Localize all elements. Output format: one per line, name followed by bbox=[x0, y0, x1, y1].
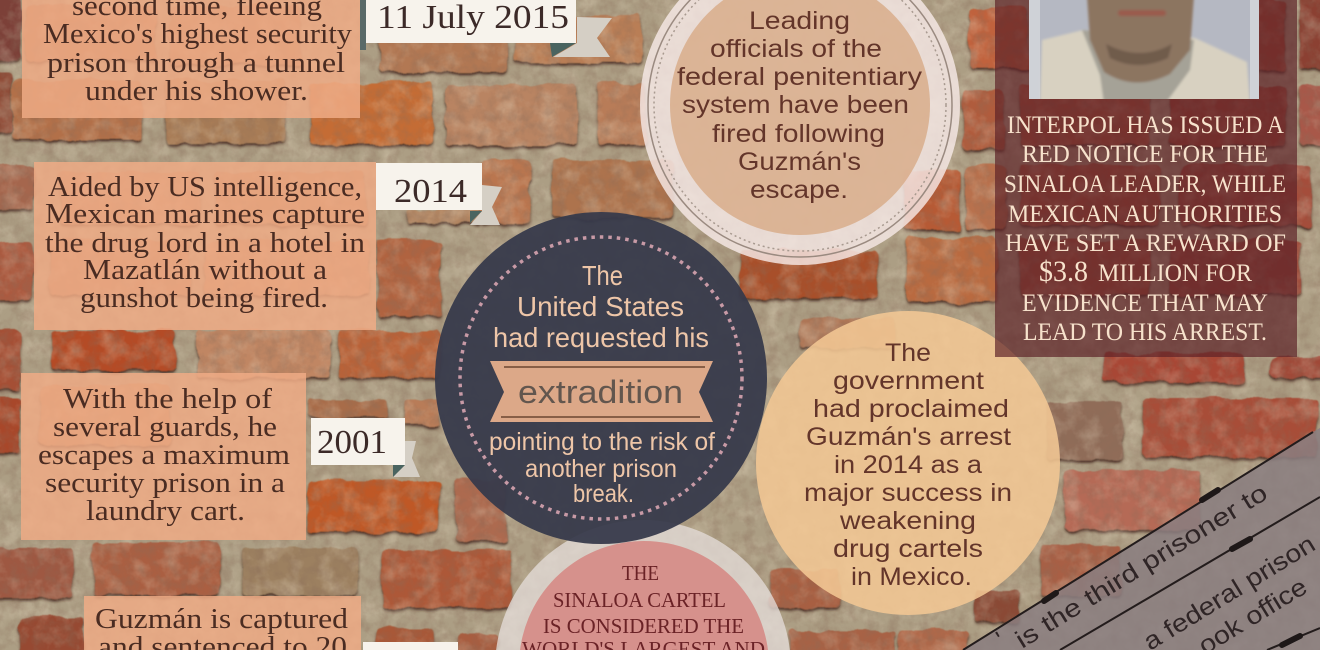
circle: officials fired: system have been bbox=[682, 91, 909, 119]
circle: dark extradition: The bbox=[582, 260, 623, 291]
timeline panel: 2015 escape bbox=[22, 0, 360, 118]
circle: dark extradition: pointing to the risk of bbox=[489, 428, 715, 456]
timeline panel: 2001 escape: escapes a maximum bbox=[38, 440, 290, 471]
panel: Interpol red notice: MILLION FOR bbox=[1098, 260, 1252, 287]
circle: pink Sinaloa cartel: SINALOA CARTEL bbox=[553, 588, 726, 612]
timeline panel: 2001 escape: several guards, he bbox=[53, 412, 277, 443]
timeline panel: 2014 capture bbox=[34, 162, 376, 330]
timeline panel: 2015 escape: Mexico's highest security bbox=[43, 19, 352, 50]
circle: pink Sinaloa cartel: IS CONSIDERED THE bbox=[543, 614, 744, 638]
circle: pink Sinaloa cartel: THE bbox=[622, 561, 659, 585]
timeline panel: 2014 capture: Aided by US intelligence, bbox=[48, 172, 362, 203]
circle: government proclaimed arrest: Guzmán's arrest bbox=[806, 423, 1011, 451]
date tag: 2014 bbox=[376, 163, 502, 225]
circle: government proclaimed arrest: drug cartels bbox=[833, 535, 983, 563]
circle: officials fired: Leading bbox=[749, 7, 850, 35]
timeline panel: 2001 escape: laundry cart. bbox=[86, 496, 245, 527]
date tag: 11 July 2015: 11 July 2015 bbox=[377, 0, 569, 36]
timeline panel: 2014 capture: Mazatlán without a bbox=[83, 255, 328, 286]
circle: government proclaimed arrest bbox=[756, 311, 1060, 615]
circle: dark extradition: another prison bbox=[525, 455, 677, 483]
circle: officials fired: officials of the bbox=[710, 35, 882, 63]
date tag: 2001: 2001 bbox=[317, 424, 387, 461]
circle: officials fired: federal penitentiary bbox=[677, 63, 923, 91]
panel: Interpol red notice: HAVE SET A REWARD OF bbox=[1005, 230, 1286, 257]
timeline panel: 2014 capture: the drug lord in a hotel in bbox=[45, 228, 365, 259]
circle: officials fired: escape. bbox=[750, 176, 848, 204]
ribbon: extradition bbox=[490, 361, 713, 422]
circle: officials fired bbox=[640, 0, 960, 265]
panel: Interpol red notice: INTERPOL HAS ISSUED A bbox=[1007, 112, 1284, 139]
circle: government proclaimed arrest: in Mexico. bbox=[851, 563, 972, 591]
circle: government proclaimed arrest: The bbox=[885, 339, 931, 367]
barbed wire banner bbox=[963, 428, 1320, 650]
date tag: 2014: 2014 bbox=[394, 173, 467, 210]
date tag: cut off at bottom bbox=[363, 642, 458, 650]
barbed wire banner: is the third prisoner to bbox=[1011, 479, 1272, 650]
timeline panel: 2015 escape: under his shower. bbox=[85, 76, 308, 107]
circle: government proclaimed arrest: weakening bbox=[839, 507, 976, 535]
circle: pink Sinaloa cartel bbox=[495, 520, 791, 650]
panel: Interpol red notice: MEXICAN AUTHORITIES bbox=[1008, 201, 1282, 228]
photo: Guzmán mugshot bbox=[1029, 0, 1259, 104]
circle: dark extradition bbox=[435, 212, 767, 544]
date tag: 11 July 2015 bbox=[360, 0, 612, 57]
circle: government proclaimed arrest: had proclaimed bbox=[813, 395, 1009, 423]
circle: officials fired: fired following bbox=[712, 120, 885, 148]
timeline panel: 2001 escape: With the help of bbox=[63, 384, 273, 415]
circle: government proclaimed arrest: major success in bbox=[804, 479, 1012, 507]
timeline panel: capture and sentence bbox=[84, 596, 361, 650]
circle: dark extradition: break. bbox=[573, 480, 634, 508]
panel: Interpol red notice: $3.8 bbox=[1039, 255, 1088, 288]
panel: Interpol red notice: EVIDENCE THAT MAY bbox=[1022, 290, 1268, 317]
panel: Interpol red notice: RED NOTICE FOR THE bbox=[1022, 141, 1268, 168]
ribbon: extradition: extradition bbox=[518, 374, 683, 410]
circle: government proclaimed arrest: government bbox=[833, 367, 984, 395]
panel: Interpol red notice bbox=[995, 0, 1297, 357]
circle: dark extradition: had requested his bbox=[493, 322, 709, 353]
timeline panel: 2001 escape bbox=[21, 373, 306, 540]
circle: officials fired: Guzmán's bbox=[738, 148, 861, 176]
date tag: 2001 bbox=[311, 418, 420, 477]
circle: government proclaimed arrest: in 2014 as a bbox=[834, 451, 982, 479]
timeline panel: 2014 capture: gunshot being fired. bbox=[80, 283, 328, 314]
timeline panel: 2001 escape: security prison in a bbox=[45, 468, 286, 499]
circle: dark extradition: United States bbox=[517, 291, 684, 322]
timeline panel: capture and sentence: Guzmán is captured bbox=[95, 604, 348, 635]
panel: Interpol red notice: SINALOA LEADER, WHILE bbox=[1004, 171, 1286, 198]
timeline panel: 2015 escape: prison through a tunnel bbox=[47, 48, 345, 79]
panel: Interpol red notice: LEAD TO HIS ARREST. bbox=[1023, 319, 1267, 346]
timeline panel: 2014 capture: Mexican marines capture bbox=[45, 199, 365, 230]
